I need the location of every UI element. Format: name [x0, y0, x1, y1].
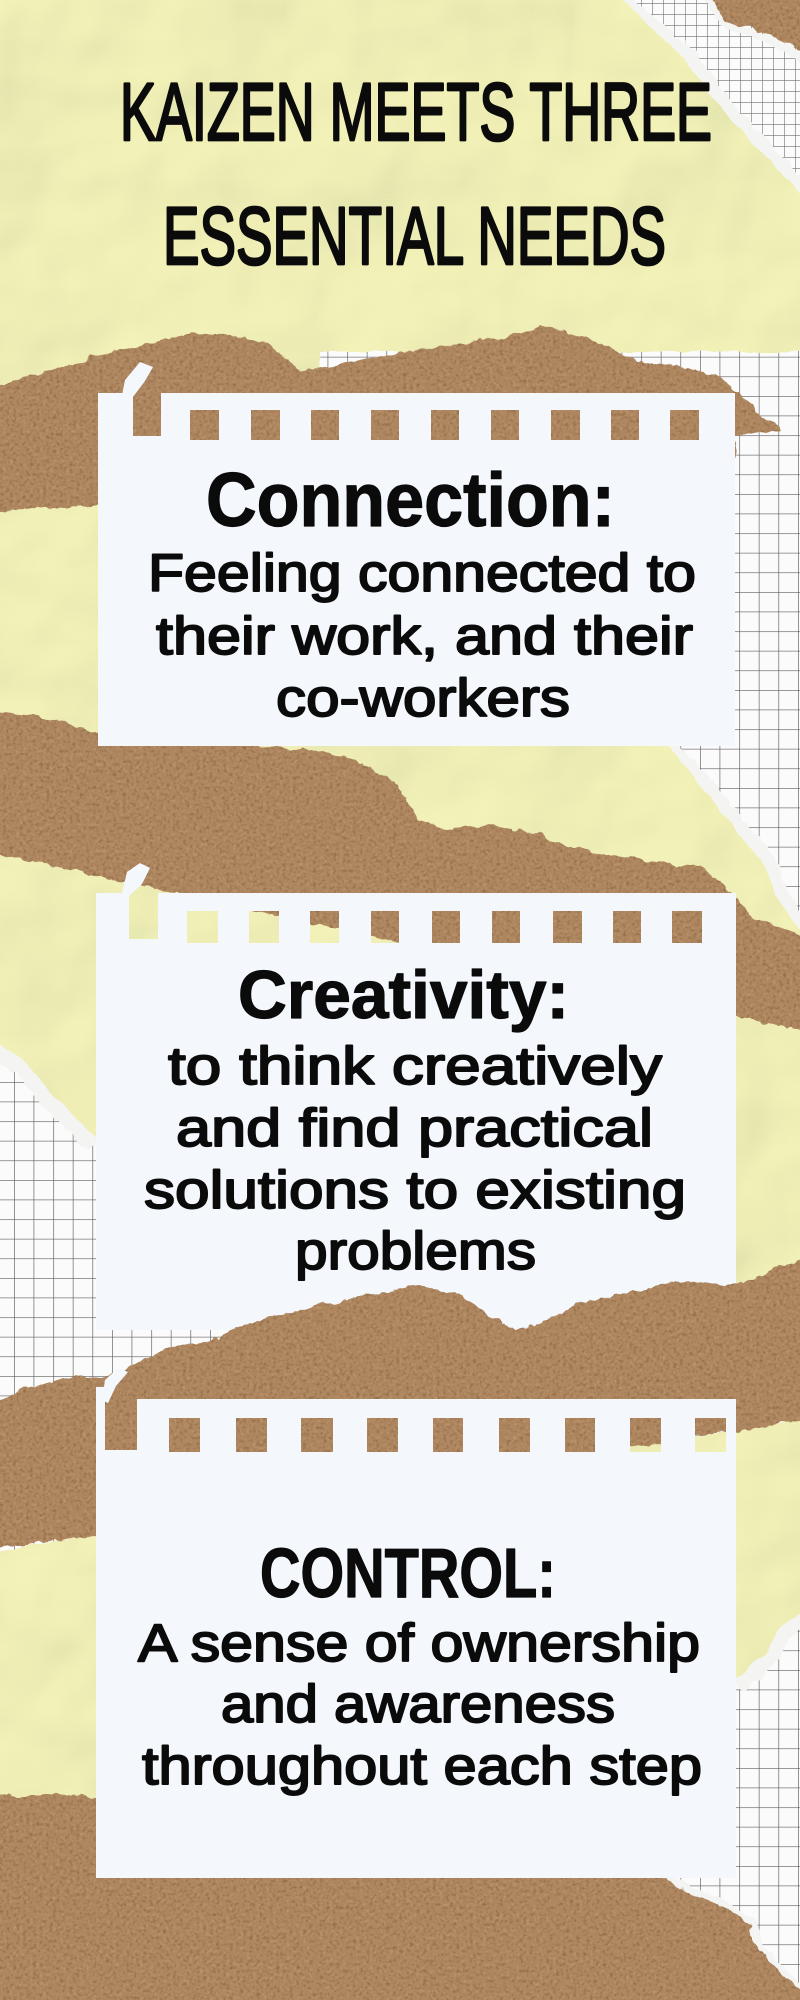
text: creativity description: to think creatively — [168, 1037, 663, 1096]
heading: control: CONTROL: — [260, 1534, 556, 1612]
heading: connection: Connection: — [206, 458, 615, 543]
heading: creativity: Creativity: — [238, 957, 569, 1033]
yellow paper: second layer behind card 2 — [0, 740, 800, 1335]
brown paper band 1 — [0, 325, 781, 512]
icon: torn paper tab — [122, 362, 153, 397]
panel: creativity note card — [96, 863, 736, 1330]
brown paper scrap: top right corner — [707, 0, 800, 53]
note paper with punched holes — [96, 893, 736, 1330]
text: control description: A sense of ownership — [138, 1614, 700, 1673]
text: control description — [138, 1614, 702, 1796]
brown paper band 2 — [0, 711, 800, 1033]
note paper with punched holes — [96, 1387, 736, 1878]
title — [120, 67, 712, 282]
panel: connection note card — [98, 362, 735, 746]
text: connection description — [148, 544, 696, 728]
text: control description: throughout each step — [142, 1737, 702, 1796]
yellow paper: lower layer behind card 3 — [0, 1418, 800, 1810]
note paper with punched holes — [98, 393, 735, 746]
text: connection description: Feeling connected to — [148, 544, 696, 603]
text: connection description: their work, and their — [156, 607, 693, 666]
text: connection description: co-workers — [276, 669, 570, 728]
brown paper band 3 — [0, 1254, 800, 1551]
text: creativity description — [144, 1037, 686, 1281]
yellow paper: middle strip — [0, 480, 700, 740]
text: control description: and awareness — [221, 1675, 615, 1734]
icon: torn paper tab — [102, 1368, 128, 1403]
brown paper band 4 at the bottom — [0, 1795, 800, 2000]
icon: torn paper tab — [122, 863, 150, 896]
text: creativity description: and find practical — [176, 1099, 653, 1158]
yellow crumpled paper: title background — [0, 0, 800, 430]
text: creativity description: solutions to existing — [144, 1161, 686, 1220]
text: creativity description: problems — [295, 1222, 536, 1281]
panel: control note card — [96, 1368, 736, 1878]
